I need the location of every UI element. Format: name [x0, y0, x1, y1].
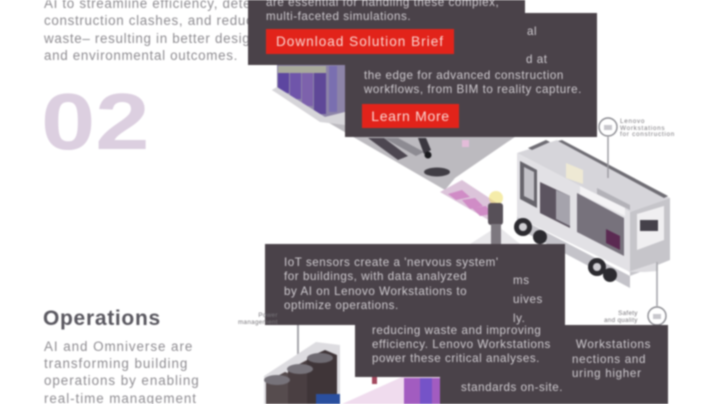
panel: simulation callout: [248, 0, 525, 65]
purple server racks: [272, 65, 345, 125]
edge text: the edge for advanced construction: [364, 69, 564, 82]
button: learn more: Learn More: [371, 108, 450, 124]
button: download solution brief: Download Solution Brief: [276, 34, 444, 49]
button: learn more: [362, 104, 459, 128]
heading: Operations: Operations: [43, 307, 161, 330]
IoT text: for buildings, with data analyzed: [284, 270, 467, 283]
remnant text: ms: [513, 274, 530, 287]
button: download solution brief: [266, 29, 454, 54]
simulation text: multi-faceted simulations.: [266, 10, 411, 23]
intro text: design section: and environmental outcomes.: [44, 48, 238, 63]
worker: [488, 191, 503, 245]
label: power management: [238, 312, 278, 326]
quality text: uring higher: [572, 367, 642, 380]
efficiency text: efficiency. Lenovo Workstations: [372, 338, 551, 351]
efficiency text: reducing waste and improving: [372, 324, 541, 337]
label: workstation callout: [619, 118, 675, 138]
building operations illustration: [264, 325, 440, 404]
remnant text: d at: [526, 53, 548, 66]
standards text: standards on-site.: [461, 381, 563, 394]
operations text: transforming building: [44, 356, 188, 371]
efficiency text: [372, 324, 551, 366]
panel: efficiency: [355, 325, 440, 377]
efficiency text: power these critical analyses.: [372, 352, 540, 365]
remnant text: uives: [513, 293, 543, 306]
operations text: operations by enabling: [44, 373, 200, 388]
remnant text: al: [527, 25, 537, 38]
machinery on floor: [368, 138, 469, 176]
intro text: design section: [43, 0, 263, 63]
site floor: [272, 50, 525, 244]
operations text: [44, 339, 200, 404]
panel: IoT nervous system: [265, 244, 565, 325]
callout icon: workstations: [599, 118, 617, 178]
edge text: workflows, from BIM to reality capture.: [364, 83, 582, 96]
IoT text: by AI on Lenovo Workstations to: [284, 285, 467, 298]
intro text: design section: waste– resulting in better design: [44, 31, 258, 46]
remnant text: ly.: [513, 312, 525, 325]
section number 02: 02: [41, 77, 150, 166]
IoT text: [284, 256, 499, 312]
IoT text: optimize operations.: [284, 299, 399, 312]
label: safety and quality: [604, 310, 638, 324]
mobile site trailer: [514, 140, 670, 288]
label: safety and quality: Safety: [618, 310, 638, 317]
callout icon: safety: [648, 262, 666, 325]
label: workstation callout: Lenovo: [620, 118, 645, 125]
label: power management: Power: [258, 312, 278, 319]
quality text: nections and: [572, 353, 646, 366]
IoT text: IoT sensors create a 'nervous system': [284, 256, 499, 269]
quality text: Workstations: [576, 338, 651, 351]
intro text: design section: construction clashes, and reduce: [44, 13, 262, 28]
panel: quality: [440, 325, 668, 404]
quality text: [572, 338, 651, 380]
edge text: [363, 69, 582, 96]
remnant text: [512, 274, 543, 326]
label: workstation callout: for construction: [620, 131, 675, 138]
label: safety and quality: and quality: [604, 317, 638, 324]
operations text: AI and Omniverse are: [44, 339, 193, 354]
label: power management: management: [238, 319, 278, 326]
simulation text: [266, 0, 499, 23]
label: workstation callout: Workstations: [620, 125, 665, 132]
panel: edge workstation callout: [345, 13, 597, 137]
